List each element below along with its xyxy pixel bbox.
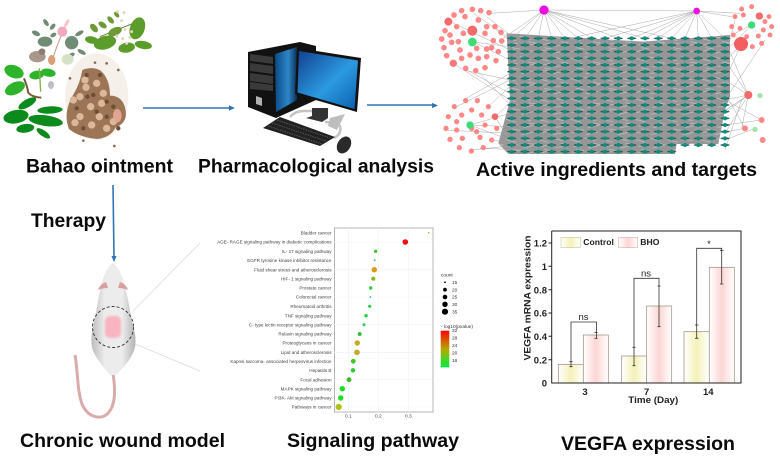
count size legend: count (441, 272, 453, 278)
edge mesh (443, 10, 765, 154)
dot plot: signaling pathway enrichment (217, 228, 473, 420)
pathway labels: IL- 17 signaling pathway (282, 249, 332, 254)
herb: green plant with small blossoms (84, 11, 153, 54)
heading: Chronic wound model: Chronic wound model (20, 431, 225, 452)
top-left ingredient cluster (442, 9, 502, 71)
p-value colour legend: 32 (452, 328, 458, 334)
heading: VEGFA expression: VEGFA expression (561, 434, 735, 455)
pathway labels: Hepatitis B (309, 368, 332, 373)
x axis ticks: 0.2 (375, 414, 382, 420)
heading: Signaling pathway: Signaling pathway (287, 431, 459, 452)
arrow: ointment to analysis (143, 105, 235, 111)
heading: Bahao ointment: Bahao ointment (26, 156, 174, 178)
p-value colour legend: 24 (452, 343, 458, 349)
y axis tick labels: 0.6 (534, 308, 547, 320)
y axis tick labels: 0.8 (534, 285, 547, 296)
pathway labels: Fluid shear stress and atherosclerosis (254, 267, 332, 272)
illustration: desktop computer (248, 42, 361, 156)
pathway labels: TNF signaling pathway (285, 313, 332, 318)
pathway labels: C- type lectin receptor signaling pathway (249, 322, 332, 327)
heading: Therapy: Therapy (31, 211, 106, 232)
x axis tick labels (582, 387, 714, 398)
x axis tick labels: 3 (582, 387, 588, 398)
plot frame (334, 228, 433, 412)
count size legend: 25 (452, 295, 458, 301)
herb: bright green sprig (2, 55, 56, 98)
y axis tick labels: 0.2 (534, 355, 547, 366)
p-value colour legend: 20 (452, 351, 458, 357)
illustration: chronic wound rat model (75, 263, 136, 417)
heading: Active ingredients and targets: Active ingredients and targets (476, 160, 757, 181)
y axis title: VEGFA mRNA expression (522, 235, 534, 360)
computer tower (248, 42, 316, 118)
dashed circle around wound (92, 306, 134, 348)
pathway labels (217, 230, 332, 410)
count size legend: 20 (452, 287, 458, 293)
target nodes grid (505, 35, 732, 155)
pathway labels: Colorectal cancer (296, 295, 332, 300)
ointment powder pile (65, 53, 128, 146)
pathway labels: Relaxin signaling pathway (278, 332, 332, 337)
herb: grey-green plant with pink flower (29, 18, 87, 65)
arrow: analysis to network (367, 103, 438, 108)
herb: dark green leaves (2, 95, 64, 140)
y axis tick labels (534, 238, 548, 390)
bar chart: VEGFA mRNA expression (522, 231, 741, 406)
pathway labels: Rheumatoid arthritis (290, 304, 332, 309)
magenta hub nodes (539, 5, 700, 15)
pathway labels: Kaposi sarcoma- associated herpesvirus infection (230, 359, 332, 364)
significance labels: ns (641, 268, 651, 280)
significance labels: ns (578, 312, 589, 323)
count size legend: 35 (452, 309, 458, 315)
rat body (91, 263, 136, 375)
significance labels: * (707, 239, 711, 250)
wound site (105, 316, 121, 338)
pathway labels: PI3K- Akt signaling pathway (275, 396, 332, 401)
illustration: medicinal herbs and ointment powder (2, 11, 153, 146)
x axis ticks: 0.1 (345, 414, 352, 420)
y axis tick labels: 0 (542, 378, 547, 390)
bottom-left ingredient cluster (446, 101, 498, 151)
x axis ticks (345, 414, 412, 420)
pathway labels: HIF- 1 signaling pathway (281, 276, 332, 281)
count size legend: 15 (452, 280, 458, 286)
computer keyboard (263, 117, 335, 146)
data points (336, 232, 430, 410)
y axis tick labels: 0.4 (534, 332, 548, 343)
pathway labels: Bladder cancer (301, 230, 332, 235)
chart legend (561, 237, 660, 248)
chart legend: Control (583, 237, 614, 247)
top-right ingredient cluster (732, 7, 772, 51)
p-value colour legend (441, 324, 473, 367)
computer mouse (334, 134, 354, 156)
pathway labels: MAPK signaling pathway (281, 386, 332, 391)
rat ears (98, 282, 128, 290)
count size legend: 30 (452, 302, 458, 308)
p-value colour legend: 16 (452, 358, 458, 364)
y axis tick labels: 1.2 (534, 238, 547, 250)
cables and speaker (290, 111, 340, 138)
right-side small clusters (742, 91, 766, 143)
pathway labels: Proteoglycans in cancer (282, 341, 332, 346)
axes (548, 231, 741, 383)
pathway labels: Pathways in cancer (292, 405, 332, 410)
heading: Pharmacological analysis: Pharmacological analysis (198, 156, 434, 178)
pathway labels: Focal adhesion (300, 377, 332, 382)
bars (558, 267, 734, 383)
y axis tick labels: 1 (542, 262, 548, 273)
error bars and significance brackets (570, 248, 723, 367)
count size legend (441, 272, 458, 315)
computer monitor (295, 48, 361, 130)
x axis tick labels: 14 (703, 387, 714, 398)
x axis ticks: 0.3 (405, 414, 412, 420)
x axis title: Time (Day) (628, 395, 678, 406)
p-value colour legend: 28 (452, 335, 458, 341)
pathway labels: Lipid and atherosclerosis (281, 350, 332, 355)
pathway labels: EGFR tyrosine kinase inhibitor resistance (247, 258, 332, 263)
chart legend: BHO (640, 237, 660, 247)
zoom guide lines from wound to pathway chart (133, 243, 200, 371)
significance labels (578, 239, 711, 323)
x axis tick labels: 7 (644, 387, 649, 398)
network diagram: active ingredients and targets (442, 5, 772, 155)
arrow: therapy down to rat (111, 185, 117, 262)
pathway labels: AGE- RAGE signaling pathway in diabetic complications (217, 240, 332, 245)
pathway labels: Prostate cancer (299, 286, 332, 291)
p-value colour legend: - log10(pvalue) (441, 324, 473, 330)
rat tail (75, 355, 115, 417)
